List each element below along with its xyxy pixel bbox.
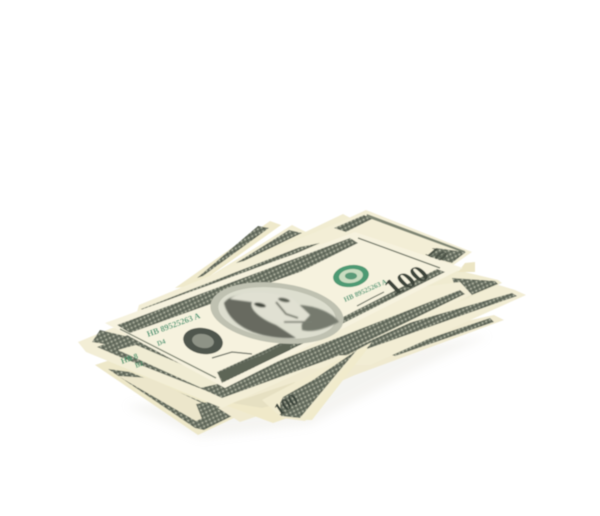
top band xyxy=(117,238,358,333)
steep bill with 100 at bottom: 100 xyxy=(271,390,302,419)
back fanned bills xyxy=(150,214,358,310)
top bill: D4 xyxy=(156,337,167,348)
portrait xyxy=(207,275,347,351)
thin frame lines xyxy=(120,329,216,378)
lowest bill xyxy=(95,360,240,435)
second full bill: HB 8 xyxy=(120,351,139,366)
serial numbers: HB 89525263 A xyxy=(145,310,202,339)
steep bill with 100 at bottom xyxy=(262,342,372,421)
signatures and small print xyxy=(212,352,252,358)
soft shadow under stack xyxy=(125,335,490,438)
top bill xyxy=(105,232,463,388)
top bill: HB 89525263 A xyxy=(343,278,388,304)
back bill with 100 corner: 10 xyxy=(421,244,452,265)
lower band xyxy=(217,269,445,383)
black seal xyxy=(181,325,225,357)
lower cream strips xyxy=(222,382,305,423)
back bill with 100 corner xyxy=(137,210,472,313)
second full bill: B2 xyxy=(134,359,145,370)
right lower bills xyxy=(218,262,526,422)
green treasury seal xyxy=(332,263,370,289)
second full bill xyxy=(78,282,472,408)
denomination 100: 100 xyxy=(377,261,435,300)
